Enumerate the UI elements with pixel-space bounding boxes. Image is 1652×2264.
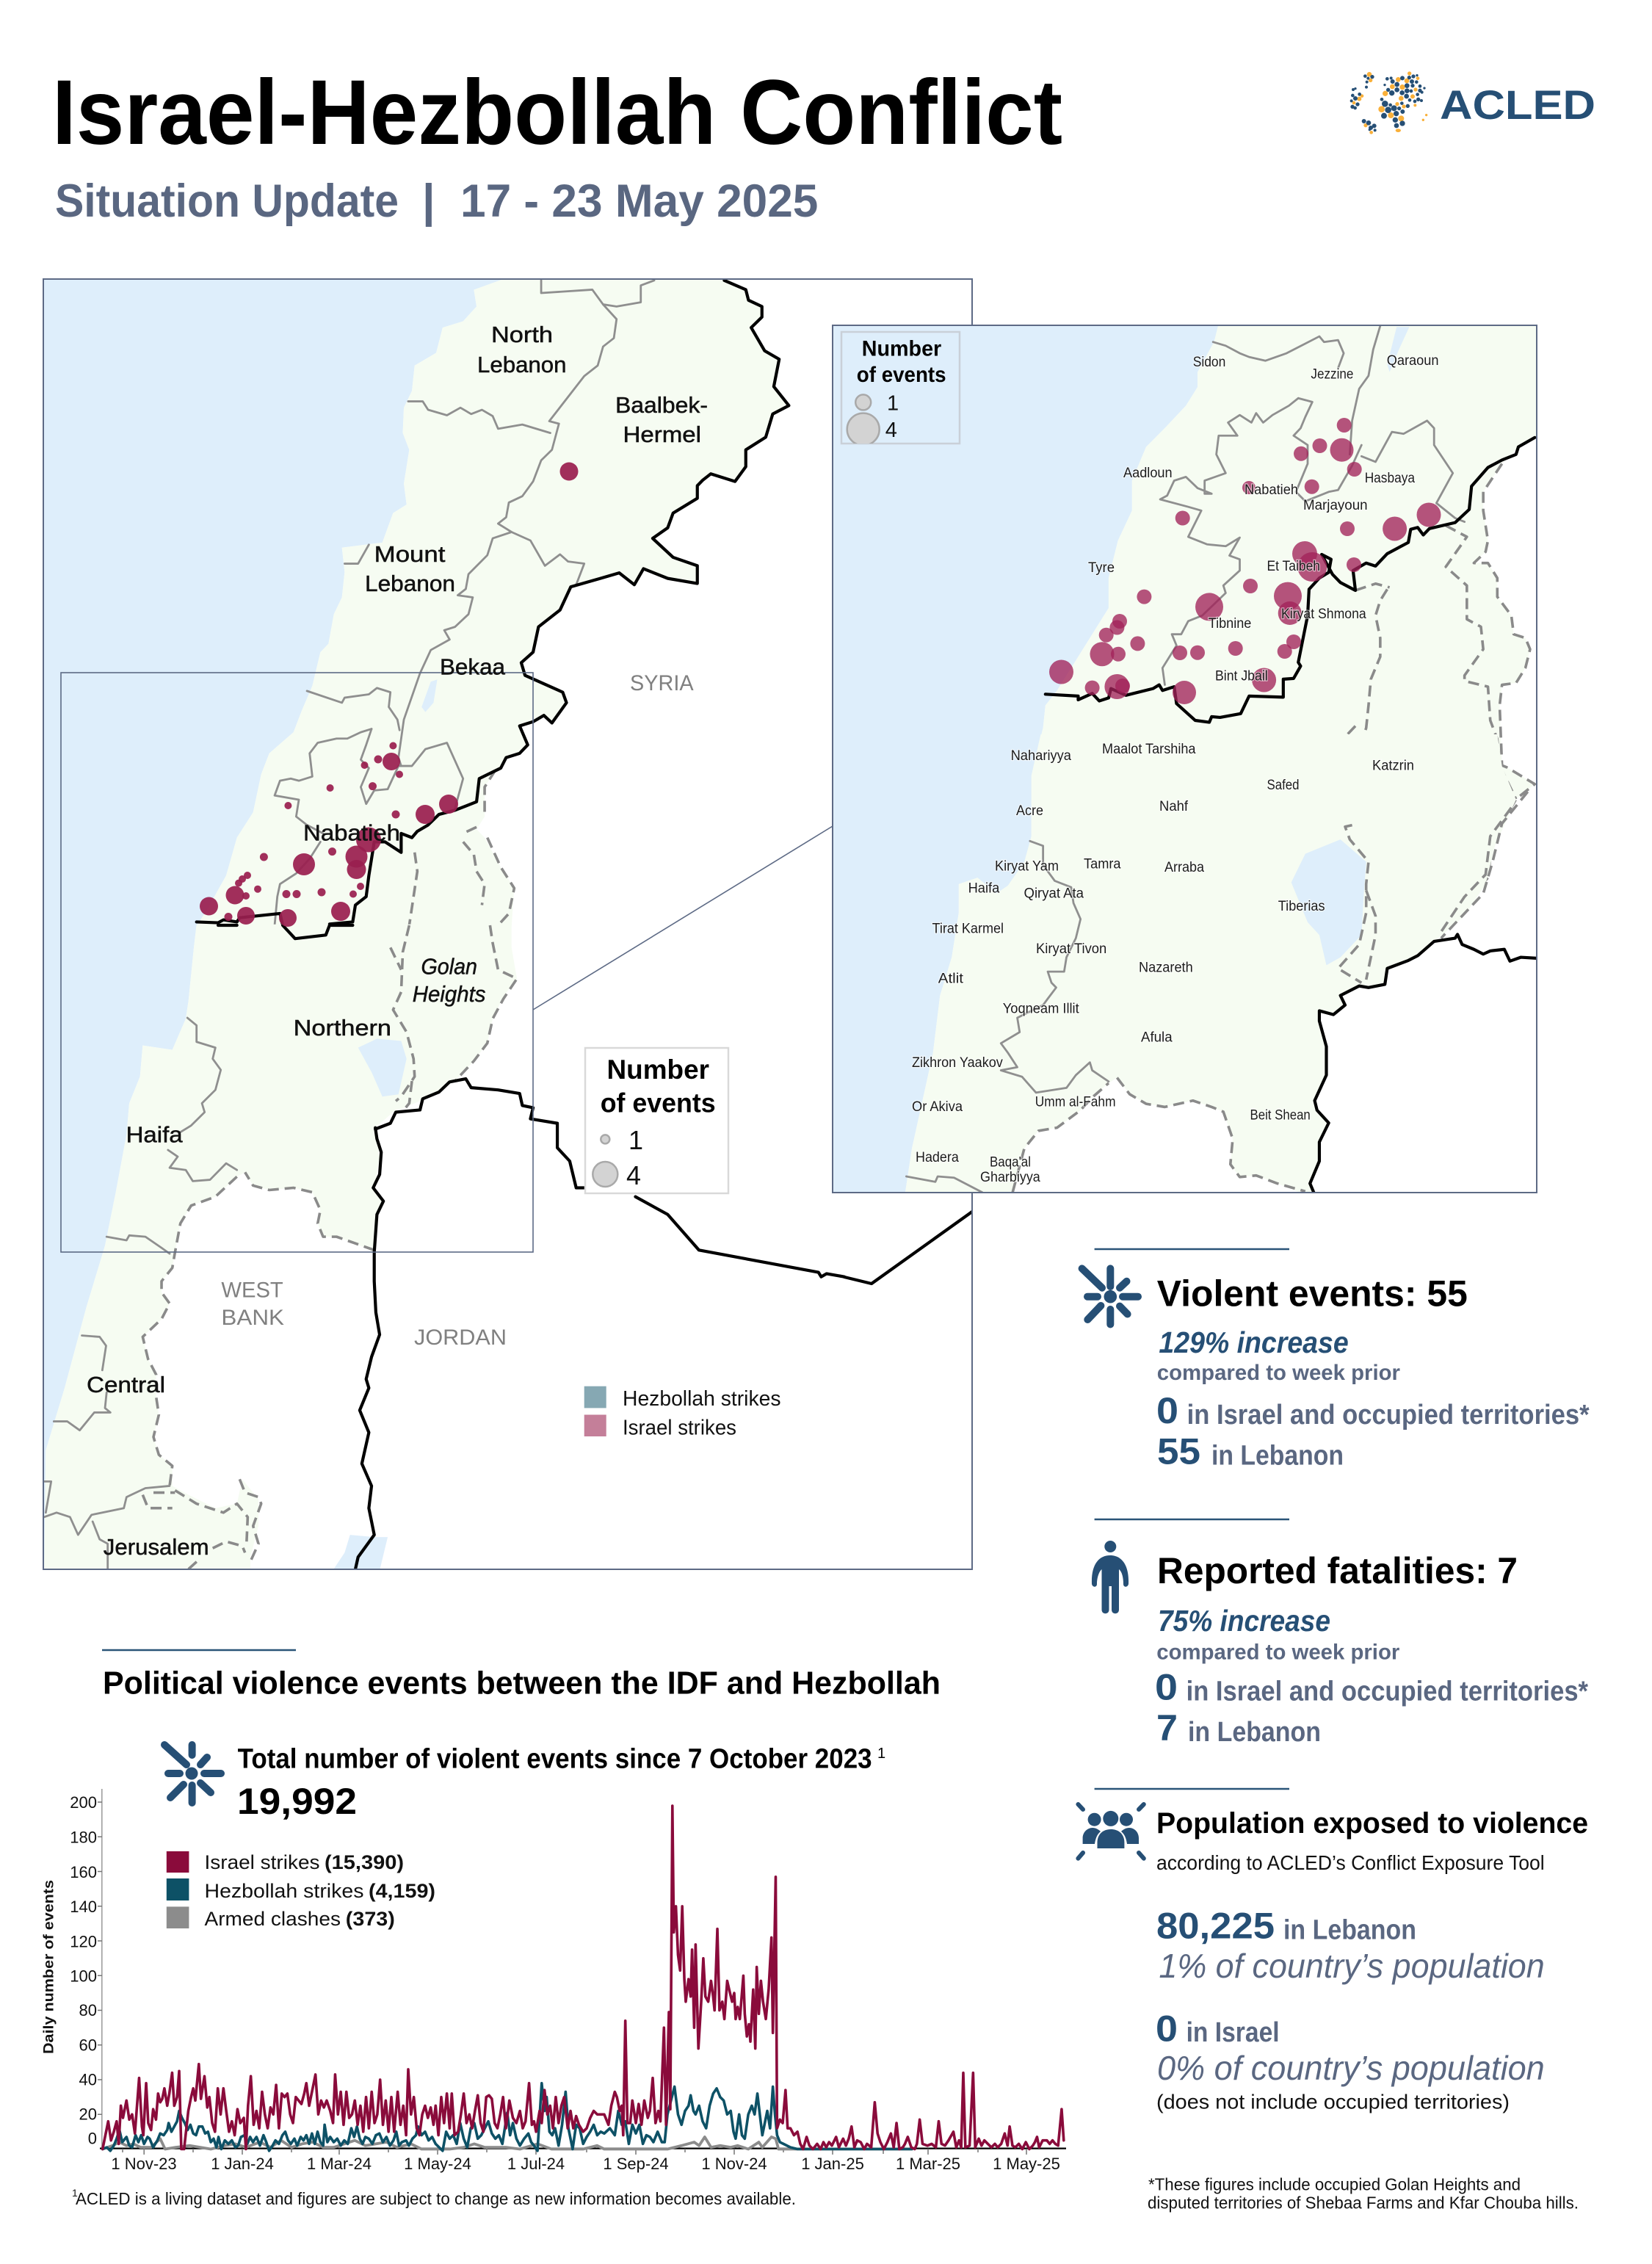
panel: violent events: compared to week prior (1157, 1361, 1400, 1385)
panel: population exposed: 1% of country’s population (1159, 1947, 1545, 1985)
panel: reported fatalities: 7 (1156, 1707, 1178, 1748)
town labels: Nahf (1159, 799, 1189, 814)
y-axis labels: 80 (79, 2001, 97, 2019)
town labels: Baqa'al (990, 1154, 1031, 1171)
panel: population exposed: 80,225 (1156, 1905, 1275, 1946)
panel: violent events (1082, 1249, 1590, 1472)
y-axis labels: 20 (79, 2105, 97, 2124)
town labels: Beit Shean (1250, 1108, 1311, 1124)
x-axis labels: 1 Jan-24 (211, 2155, 274, 2173)
x-axis labels: 1 Sep-24 (603, 2155, 669, 2173)
town labels: Kiryat Yam (995, 859, 1059, 875)
region labels: Northern (294, 1015, 391, 1041)
connector line to inset (533, 826, 833, 1010)
panel: violent events: in Lebanon (1211, 1441, 1344, 1472)
heading: Violent events: 55 (1157, 1273, 1468, 1314)
inset frame (833, 325, 1537, 1193)
icon: people group (1078, 1804, 1144, 1859)
region labels: Nabatieh (303, 820, 400, 846)
chart legend: Hezbollah strikes (204, 1880, 364, 1902)
event bubbles on main map (200, 463, 579, 927)
town labels: Atlit (938, 972, 964, 987)
event bubbles on inset (1049, 418, 1441, 704)
town labels: Kiryat Tivon (1036, 941, 1106, 957)
map frame (43, 279, 972, 1569)
series: Israel strikes (103, 1806, 1064, 2149)
town labels: Or Akiva (912, 1099, 963, 1115)
town labels: Jezzine (1311, 367, 1353, 383)
panel: chart section (42, 1650, 1066, 2208)
panel: main map of Lebanon and northern Israel (0, 264, 972, 1575)
town labels: Hadera (916, 1150, 959, 1165)
panel: population exposed: in Lebanon (1283, 1915, 1416, 1946)
y-axis labels: 180 (70, 1828, 97, 1846)
total events caption: Total number of violent events since 7 October 2023 (238, 1744, 872, 1775)
region labels: Lebanon (365, 571, 455, 596)
x-axis labels: 1 Jan-25 (801, 2155, 864, 2173)
town labels: Tyre (1088, 560, 1115, 576)
x-axis labels (111, 2155, 1060, 2173)
town labels: Gharbiyya (980, 1170, 1040, 1185)
extent box of the inset (61, 673, 533, 1252)
y-axis labels: 100 (70, 1967, 97, 1985)
x-axis labels: 1 May-24 (404, 2155, 471, 2173)
footnote: occupied territories: *These figures include occupied Golan Heights and (1148, 2175, 1521, 2194)
y-axis labels: 140 (70, 1898, 97, 1916)
town labels: Marjayoun (1303, 498, 1368, 513)
x-axis labels: 1 Nov-24 (701, 2155, 767, 2173)
region labels: Bekaa (440, 654, 506, 680)
region labels: Baalbek- (615, 392, 708, 418)
legend: number of events (inset): 4 (885, 419, 897, 442)
footnote: occupied territories: disputed territories of Shebaa Farms and Kfar Chouba hills. (1148, 2193, 1579, 2212)
panel: reported fatalities: Reported fatalities: 7 (1157, 1550, 1518, 1591)
subtitle (55, 176, 818, 227)
town labels: Tibnine (1209, 616, 1251, 632)
panel: population exposed: according to ACLED’s Conflict Exposure Tool (1156, 1851, 1545, 1874)
legend: number of events (main map): 1 (628, 1125, 643, 1155)
panel: population exposed: (does not include occupied territories) (1156, 2090, 1510, 2113)
town labels: Sidon (1193, 355, 1225, 370)
y-axis labels (70, 1793, 97, 2147)
town labels: Kiryat Shmona (1281, 607, 1366, 622)
region labels: Mount (374, 541, 446, 567)
panel: population exposed: 0 (1156, 2008, 1178, 2049)
legend: number of events (main map) (585, 1048, 728, 1193)
icon: dotted globe (1350, 72, 1427, 134)
line chart (42, 1789, 1066, 2173)
town labels (912, 353, 1439, 1185)
panel: population exposed: in Israel (1187, 2017, 1280, 2048)
region labels: Golan (421, 954, 477, 980)
panel: population exposed (1078, 1789, 1588, 2113)
panel: reported fatalities (1092, 1519, 1588, 1748)
y-axis labels: 60 (79, 2036, 97, 2054)
panel: violent events: 129% increase (1159, 1326, 1349, 1359)
region labels: BANK (221, 1306, 284, 1330)
region labels (87, 322, 708, 1560)
land and borders: south section (0, 925, 844, 1575)
town labels: Tiberias (1278, 899, 1325, 914)
town labels: Qiryat Ata (1024, 886, 1084, 902)
region labels: Hermel (623, 422, 701, 447)
inset land, south (833, 734, 1537, 1195)
town labels: Et Taibeh (1267, 559, 1320, 574)
legend: number of events (inset): of events (857, 363, 946, 387)
total events value: 19,992 (237, 1781, 357, 1822)
region labels: Jerusalem (104, 1534, 209, 1560)
x-axis labels: 1 Mar-25 (896, 2155, 960, 2173)
y-axis labels: 120 (70, 1933, 97, 1950)
legend: number of events (inset) (841, 332, 960, 446)
footnote: living dataset: ACLED is a living dataset and figures are subject to change as new information becomes available. (76, 2189, 796, 2208)
legend: number of events (inset): Number (862, 337, 942, 361)
chart legend: Israel strikes (204, 1851, 320, 1873)
panel: reported fatalities: in Lebanon (1188, 1717, 1321, 1748)
panel: violent events: 55 (1157, 1431, 1200, 1472)
region labels: Central (87, 1372, 165, 1397)
land and borders: north section (0, 264, 789, 926)
legend: strike types (584, 1386, 781, 1440)
town labels: Katzrin (1372, 759, 1414, 774)
town labels: Tamra (1084, 857, 1121, 872)
logo: ACLED (1350, 72, 1595, 134)
town labels: Afula (1141, 1030, 1173, 1046)
panel: violent events: in Israel and occupied territories* (1187, 1400, 1590, 1431)
town labels: Aadloun (1123, 466, 1173, 481)
series: Hezbollah strikes (103, 2083, 912, 2151)
town labels: Nabatieh (1245, 482, 1298, 498)
town labels: Tirat Karmel (932, 922, 1004, 937)
region labels: Lebanon (477, 352, 567, 377)
region labels: Heights (413, 981, 486, 1007)
town labels: Nazareth (1139, 961, 1193, 975)
logo wordmark: ACLED (1440, 82, 1595, 128)
y-axis title: Daily number of events (42, 1880, 57, 2054)
panel: population exposed: Population exposed to violence (1156, 1807, 1588, 1840)
chart legend: (15,390) (325, 1851, 404, 1873)
panel: reported fatalities: 75% increase (1158, 1604, 1330, 1638)
legend: strike types: Israel strikes (623, 1417, 736, 1440)
region labels: SYRIA (630, 671, 694, 695)
x-axis labels: 1 May-25 (993, 2155, 1060, 2173)
panel: inset map of southern Lebanon and northern Israel (833, 316, 1540, 1195)
subtitle: | (422, 176, 435, 227)
subtitle: 17 - 23 May 2025 (460, 176, 818, 227)
icon: burst small (164, 1745, 221, 1803)
region labels: North (491, 322, 553, 347)
inset land, north (833, 316, 1540, 904)
y-axis labels: 0 (88, 2130, 97, 2147)
chart legend: (4,159) (369, 1880, 435, 1902)
x-axis labels: 1 Jul-24 (507, 2155, 565, 2173)
legend: number of events (inset): 1 (887, 392, 899, 416)
panel: chart section: 1 (877, 1746, 885, 1762)
panel: reported fatalities: compared to week prior (1156, 1641, 1400, 1665)
town labels: Qaraoun (1387, 353, 1439, 369)
town labels: Safed (1267, 778, 1300, 793)
icon: burst (1082, 1268, 1138, 1325)
region labels: Haifa (126, 1122, 183, 1148)
footnote: occupied territories (1148, 2175, 1579, 2212)
town labels: Haifa (968, 881, 1000, 896)
axes (98, 1789, 1066, 2155)
x-axis labels: 1 Mar-24 (307, 2155, 372, 2173)
legend: strike types: Hezbollah strikes (623, 1387, 781, 1411)
title: Israel-Hezbollah Conflict (52, 62, 1062, 164)
town labels: Acre (1016, 803, 1043, 819)
region labels: JORDAN (414, 1326, 507, 1350)
panel: population exposed: 0% of country’s population (1157, 2049, 1545, 2087)
legend: number of events (main map): of events (601, 1088, 716, 1118)
chart legend: Armed clashes (204, 1908, 341, 1930)
chart heading: Political violence events between the IDF and Hezbollah (103, 1666, 941, 1701)
legend: number of events (main map): Number (606, 1055, 709, 1085)
panel: reported fatalities: 0 (1155, 1666, 1178, 1707)
chart legend: (373) (346, 1908, 395, 1930)
legend: number of events (main map): 4 (626, 1160, 641, 1190)
town labels: Maalot Tarshiha (1102, 742, 1196, 757)
town labels: Umm al-Fahm (1035, 1094, 1116, 1110)
panel: violent events: 0 (1156, 1390, 1178, 1431)
chart legend (167, 1851, 435, 1930)
town labels: Hasbaya (1365, 471, 1415, 486)
town labels: Bint Jbail (1215, 668, 1268, 684)
series: armed clashes (103, 2137, 912, 2149)
panel: reported fatalities: in Israel and occupied territories* (1187, 1676, 1588, 1707)
y-axis labels: 160 (70, 1863, 97, 1881)
x-axis labels: 1 Nov-23 (111, 2155, 177, 2173)
region labels: WEST (221, 1278, 283, 1303)
town labels: Yoqneam Illit (1003, 1001, 1079, 1016)
town labels: Zikhron Yaakov (912, 1055, 1003, 1071)
icon: person (1092, 1541, 1128, 1613)
subtitle: Situation Update (55, 176, 399, 227)
town labels: Arraba (1164, 860, 1204, 875)
y-axis labels: 40 (79, 2070, 97, 2088)
town labels: Nahariyya (1011, 748, 1071, 764)
y-axis labels: 200 (70, 1793, 97, 1812)
footnote: living dataset: 1 (72, 2187, 78, 2199)
